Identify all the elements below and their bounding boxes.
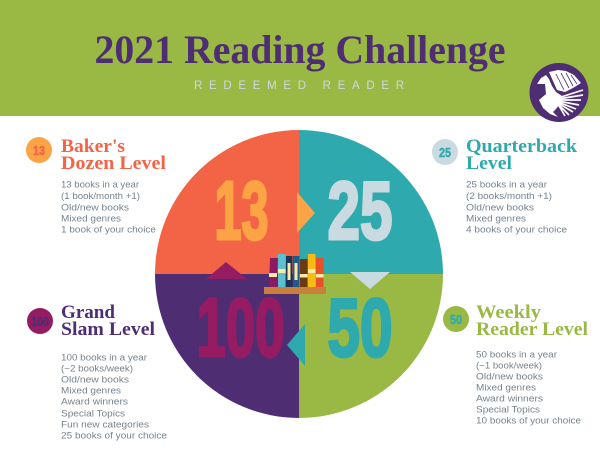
heading: Grand Slam Level — [61, 302, 155, 340]
badge: 50: 50 — [450, 312, 462, 327]
text: Baker's Dozen details: Mixed genres — [61, 214, 122, 224]
arrow: up — [206, 262, 247, 279]
subtitle: REDEEMED READER — [194, 80, 404, 92]
text: Grand Slam details: Special Topics — [61, 408, 126, 418]
badge: 13: 13 — [33, 143, 45, 158]
number 100: 100 — [196, 281, 284, 374]
text: Grand Slam details: 25 books of your choice — [61, 430, 167, 440]
text: Grand Slam details: (~2 books/week) — [61, 364, 133, 374]
text: Baker's Dozen details — [61, 180, 156, 234]
badge: 25: 25 — [439, 145, 451, 160]
heading: Weekly Reader Level: Weekly — [476, 302, 542, 323]
number 13: 13 — [214, 164, 268, 257]
text: Weekly Reader details: Mixed genres — [476, 382, 537, 392]
panel: Weekly Reader Level — [443, 302, 588, 426]
heading: Grand Slam Level: Grand — [61, 302, 115, 323]
text: Quarterback details: Mixed genres — [466, 214, 527, 224]
number 25: 25 — [328, 164, 392, 257]
pie chart: four quadrants — [155, 130, 443, 418]
arrow: down — [350, 272, 390, 289]
text: Weekly Reader details: (~1 book/week) — [476, 360, 542, 370]
text: Grand Slam details: 100 books in a year — [61, 352, 147, 362]
text: Baker's Dozen details: Old/new books — [61, 202, 130, 212]
heading: Weekly Reader Level: Reader Level — [476, 319, 588, 340]
header band — [0, 0, 600, 116]
text: Grand Slam details — [61, 352, 167, 440]
text: Weekly Reader details: Award winners — [476, 394, 544, 404]
badge: 25 — [432, 139, 458, 165]
number 50: 50 — [328, 281, 392, 374]
text: Quarterback details — [466, 180, 567, 234]
text: Baker's Dozen details: 13 books in a year — [61, 180, 139, 190]
heading: Baker's Dozen Level: Dozen Level — [61, 153, 166, 174]
title: 2021 Reading Challenge — [94, 27, 506, 72]
text: Weekly Reader details: Special Topics — [476, 404, 541, 414]
icon: dove logo — [530, 63, 588, 122]
panel: Grand Slam Level — [27, 302, 167, 440]
heading: Grand Slam Level: Slam Level — [61, 319, 155, 340]
icon: books on shelf — [264, 254, 326, 294]
badge: 100: 100 — [31, 314, 49, 329]
text: Grand Slam details: Old/new books — [61, 374, 130, 384]
badge: 50 — [443, 306, 469, 332]
text: Weekly Reader details — [476, 350, 581, 426]
text: Grand Slam details: Fun new categories — [61, 420, 150, 430]
panel: Baker's Dozen Level — [26, 136, 166, 234]
heading: Baker's Dozen Level: Baker's — [61, 136, 125, 157]
text: Quarterback details: Old/new books — [466, 202, 535, 212]
text: Baker's Dozen details: (1 book/month +1) — [61, 191, 140, 201]
text: Weekly Reader details: 50 books in a year — [476, 350, 557, 360]
text: Quarterback details: 25 books in a year — [466, 180, 547, 190]
text: Weekly Reader details: Old/new books — [476, 372, 544, 382]
panel: Quarterback Level — [432, 136, 577, 234]
text: Baker's Dozen details: 1 book of your choice — [61, 224, 156, 234]
heading: Baker's Dozen Level — [61, 136, 166, 174]
text: Grand Slam details: Award winners — [61, 396, 129, 406]
arrow: left — [287, 324, 305, 366]
heading: Weekly Reader Level — [476, 302, 588, 340]
text: Weekly Reader details: 10 books of your choice — [476, 416, 581, 426]
text: Quarterback details: (2 books/month +1) — [466, 191, 552, 201]
text: Quarterback details: 4 books of your choice — [466, 224, 567, 234]
heading: Quarterback Level: Level — [466, 153, 512, 174]
text: Grand Slam details: Mixed genres — [61, 386, 122, 396]
heading: Quarterback Level: Quarterback — [466, 136, 577, 157]
arrow: right — [297, 192, 315, 233]
heading: Quarterback Level — [466, 136, 577, 174]
